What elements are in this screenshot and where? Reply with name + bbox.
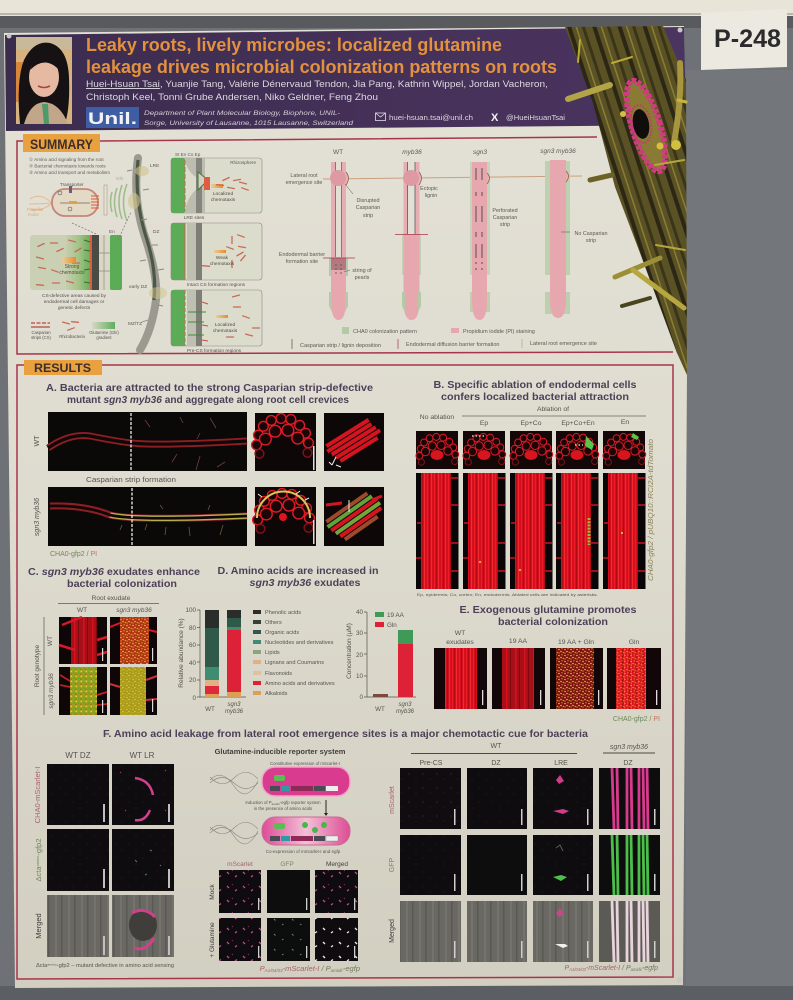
panel B column labels: En [621, 419, 629, 426]
root schematic: myb36: myb36 [402, 149, 422, 156]
panel F left row labels: CHA0-mScarlet-I [33, 767, 42, 823]
root schematic: sgn3 myb36: sgn3 myb36 [540, 148, 576, 155]
panel C heading: C. sgn3 myb36 exudates enhance [28, 567, 200, 578]
long root illustration: early DZ [129, 284, 147, 290]
summary legend: strips (CS) [31, 335, 51, 340]
bar chart: concentration: 0 [359, 694, 363, 701]
authors: Christoph Keel, Tonni Grube Andersen, Niko Geldner, Feng Zhou [86, 92, 378, 103]
panel E heading: E. Exogenous glutamine promotes [460, 605, 637, 616]
stacked bar chart: relative abundance [178, 607, 246, 715]
summary key list: ① Amino acid signaling from the root [29, 157, 104, 162]
zoom panel: LRE sites: Localized [213, 191, 233, 197]
panel C images [59, 617, 157, 715]
panel A heading [46, 382, 373, 406]
panel B cross-sections [416, 431, 646, 469]
summary caption: CS-defective areas: genetic defects [58, 305, 91, 311]
root schematic legend: Casparian strip / lignin deposition [300, 343, 381, 349]
reporter micrographs: mScarlet [227, 861, 253, 868]
summary legend [31, 322, 119, 340]
P-248 label card: P-248 [714, 25, 781, 53]
chemotaxis panel: strong [30, 229, 122, 290]
zoom panel: pre-CS regions: Localized [215, 322, 235, 328]
panel B column labels: Ep [480, 420, 488, 427]
panel E column labels: Gln [629, 639, 640, 646]
stacked bar chart: relative abundance: myb36 [225, 709, 244, 715]
root schematic: WT [323, 149, 355, 320]
bar chart: concentration: 30 [356, 630, 363, 637]
panel D heading: sgn3 myb36 exudates [250, 578, 361, 589]
contact: X handle [491, 112, 565, 124]
root schematic labels: WT: formation site [286, 259, 318, 265]
stacked bar chart: relative abundance: 20 [189, 677, 196, 684]
panel B column labels: Ep+Co [521, 420, 542, 427]
root schematic: myb36: Ectopic [420, 186, 438, 192]
panel F right headers: GFP [389, 857, 396, 872]
stacked bar chart: relative abundance: 80 [189, 625, 196, 632]
bacterium schematic [27, 176, 127, 221]
panel B longitudinal images [416, 473, 646, 589]
panel A heading: A. Bacteria are attracted to the strong Casparian strip-defective [46, 382, 373, 394]
summary panel captions: LRE sites [184, 215, 205, 221]
stacked bar chart: relative abundance: 40 [189, 660, 196, 667]
panel B side label: CHA0-gfp2 / pUBQ10::RCI2A-tdTomato [648, 439, 655, 581]
panel A: strip label: Casparian strip formation [86, 477, 176, 484]
P-248 label card [701, 9, 787, 70]
root schematic: sgn3 myb36: strip [586, 238, 596, 244]
panel C axis labels [34, 595, 159, 715]
reporter strain label: amidir [331, 968, 343, 973]
stacked bar legend: Amino acids and derivatives [265, 681, 335, 687]
root schematic labels: WT: string of [352, 268, 372, 274]
root schematic labels: WT: Lateral root [290, 173, 318, 179]
bar chart: concentration: WT [375, 706, 385, 713]
reporter system schematic: Induction of P [245, 800, 272, 805]
authors [86, 79, 548, 103]
chemotaxis panel: strong: En [109, 229, 115, 234]
chemotaxis panel: strong: chemotaxis [59, 270, 85, 276]
panel B column labels [420, 406, 646, 427]
stacked bar legend: Lignans and Coumarins [265, 660, 324, 666]
bar chart: concentration [346, 609, 416, 715]
zoom panel: pre-CS regions: chemotaxis [213, 328, 238, 334]
panel C axis labels: sgn3 myb36 [48, 673, 55, 709]
reporter system schematic: Glutamine-inducible reporter system [215, 747, 346, 756]
stacked bar legend: Flavonoids [265, 671, 292, 677]
root schematic: WT: WT [333, 149, 343, 156]
panel F right headers: Merged [389, 919, 396, 943]
root schematic: myb36 [395, 149, 438, 320]
reporter strain label, right: / P [620, 965, 658, 972]
bacterium schematic: motor [28, 212, 40, 217]
root schematic legend [292, 327, 597, 349]
root schematic: myb36: lignin [425, 193, 437, 199]
root schematic: sgn3: sgn3 [473, 149, 487, 156]
stacked bar chart: relative abundance: Relative abundance (%) [178, 618, 185, 688]
reporter system schematic [210, 747, 350, 854]
reporter micrographs: Merged [326, 861, 348, 868]
panel F right headers: mScarlet [389, 786, 396, 814]
root schematic labels: WT: Casparian [356, 205, 380, 211]
bacterium schematic: Transporter [60, 182, 84, 187]
panel A: sgn3 myb36 row [34, 487, 387, 546]
panel F footnote: amino [47, 962, 57, 966]
reporter strain label, right: -mScarlet-I [586, 965, 620, 972]
long root illustration: LRE [150, 163, 159, 169]
stacked bar chart: relative abundance: WT [205, 706, 215, 713]
title: Leaky roots, lively microbes: localized glutamine [86, 35, 502, 55]
bar chart: concentration: 20 [356, 652, 363, 659]
authors: Huei-Hsuan Tsai , Yuanjie Tang, Valérie Dénervaud Tendon, Jia Pang, Kathrin Wippel, Jordan Vacheron, [86, 79, 548, 90]
root schematic: sgn3 [470, 149, 518, 320]
panel E images [434, 648, 661, 709]
reporter strain label: P [260, 964, 265, 973]
bacterium schematic: Flagellar [27, 207, 44, 212]
root schematic: sgn3: Perforated [492, 208, 518, 214]
bar chart: concentration: 40 [356, 609, 363, 616]
root schematic: sgn3: strip [500, 222, 510, 228]
root schematic legend: Lateral root emergence site [530, 341, 597, 347]
summary key list [29, 157, 110, 175]
panel C axis labels: Root exudate [92, 595, 131, 602]
root schematic: sgn3 myb36: No Casparian [575, 231, 607, 237]
reporter system schematic: in the presence of amino acids [254, 806, 312, 811]
stacked bar chart: relative abundance: sgn3 [227, 702, 241, 708]
reporter strain label, right: A1/04/03 [568, 967, 587, 972]
reporter strain label: -egfp [343, 964, 360, 973]
root schematic labels: WT: Endodermal barrier [279, 252, 325, 258]
long root illustration: MZ/TZ [128, 321, 142, 327]
panel C axis labels: WT [47, 636, 54, 646]
stacked bar legend: Nucleotides and derivatives [265, 640, 334, 646]
panel F right headers: DZ [491, 760, 501, 767]
reporter strain label: A1/04/03 [264, 968, 283, 973]
panel C axis labels: sgn3 myb36 [116, 607, 152, 614]
panel A: sgn3 myb36 row: sgn3 myb36 [34, 498, 41, 536]
panel A: channel key: CHA0-gfp2 / PI [50, 551, 97, 558]
stacked bar legend: Phenolic acids [265, 610, 301, 616]
zoom panel: LRE sites: Rhizosphere [230, 160, 256, 165]
summary caption: CS-defective areas: endodermal cell damages or [44, 299, 105, 305]
panel C axis labels: WT [77, 607, 87, 614]
panel F right headers [389, 743, 655, 943]
panel F right headers: LRE [554, 760, 568, 767]
panel E heading: bacterial colonization [498, 617, 608, 628]
portrait photo [16, 37, 72, 124]
panel B column labels: No ablation [420, 414, 454, 421]
bacterium schematic: Gln [116, 176, 124, 181]
panel E channel key: CHA0-gfp2 / PI [613, 716, 660, 723]
bar chart: concentration: 10 [356, 673, 363, 680]
bar chart: concentration: 19 AA [387, 612, 405, 619]
affiliation: Sorge, University of Lausanne, 1015 Lausanne, Switzerland [144, 120, 353, 127]
summary legend: gradient [96, 335, 112, 340]
panel E column labels: 19 AA + Gln [558, 639, 594, 646]
long root illustration: DZ [153, 229, 159, 235]
panel C heading: bacterial colonization [67, 579, 177, 590]
root schematic labels: WT [279, 173, 380, 281]
reporter micrographs [209, 861, 358, 961]
stacked bar legend: Lipids [265, 650, 280, 656]
affiliation: Department of Plant Molecular Biology, Biophore, UNIL- [144, 110, 341, 117]
reporter strain label: -mScarlet-I [283, 964, 319, 973]
chemotaxis panel: strong: Strong [65, 264, 80, 270]
bar chart: concentration: sgn3 [398, 702, 412, 708]
root schematic legend: Propidium iodide (PI) staining [463, 329, 535, 335]
title: leakage drives microbial colonization patterns on roots [86, 57, 557, 77]
stacked bar legend: Others [265, 620, 282, 626]
panel A: WT row [34, 412, 384, 471]
panel D heading: D. Amino acids are increased in [218, 566, 378, 577]
zoom panel: intact CS regions [171, 223, 262, 280]
reporter strain label, right: -egfp [642, 965, 658, 972]
panel E column labels: WT [455, 630, 465, 637]
zoom panel: intact CS regions: chemotaxis [210, 261, 235, 267]
summary key list: ② Bacterial chemotaxis towards roots [29, 164, 106, 168]
reporter system schematic: amidir [272, 802, 280, 806]
panel E column labels [446, 630, 640, 646]
summary heading tab: SUMMARY [30, 137, 93, 152]
panel A heading: mutant sgn3 myb36 and aggregate along root cell crevices [67, 394, 349, 406]
root schematic labels: WT: Disrupted [356, 198, 380, 204]
summary legend: Rhizobacteria [59, 334, 85, 339]
stacked bar chart: relative abundance: 100 [185, 607, 196, 614]
panel A: WT row: WT [34, 435, 41, 446]
reporter micrographs: Mock [209, 883, 216, 900]
header banner [5, 27, 686, 131]
summary legend: Glutamine (Gln) [89, 330, 119, 335]
stacked bar chart: relative abundance: 60 [189, 642, 196, 649]
results frame [17, 365, 673, 979]
root schematic: lateral root line [323, 176, 582, 179]
panel B heading: confers localized bacterial attraction [441, 391, 629, 403]
contact: email: huei-hsuan.tsai@unil.ch [389, 113, 473, 122]
panel F footnote: -gfp2 – mutant defective in amino acid sensing [57, 963, 174, 969]
panel F left image grid [47, 751, 174, 957]
reporter system schematic: Co-expression of mScarlet-I and egfp [266, 849, 341, 854]
root schematic: sgn3 myb36 [540, 148, 607, 318]
panel F right headers: sgn3 myb36 [610, 744, 648, 751]
panel F left row labels: Merged [34, 913, 43, 939]
Unil logo: Unil. [88, 109, 137, 128]
contact: X handle: @HueiHsuanTsai [506, 113, 565, 122]
bar chart: concentration: Concentration (µM) [346, 623, 353, 679]
zoom panel: LRE sites: chemotaxis [211, 197, 236, 203]
summary panel captions [184, 215, 246, 354]
results heading tab [24, 360, 102, 375]
summary frame [17, 137, 673, 354]
panel F right headers: DZ [623, 760, 633, 767]
stacked bar chart: relative abundance: 0 [192, 695, 196, 702]
zoom panel: intact CS regions: Weak [216, 255, 229, 261]
panel B footnote: Ep, epidermis; Co, cortex; En, endodermis. Ablated cells are indicated by asterisks. [417, 592, 598, 597]
panel F heading: F. Amino acid leakage from lateral root emergence sites is a major chemotactic cue for bacteria [103, 729, 588, 740]
reporter system schematic: Constitutive expression of mScarlet-I [270, 761, 340, 766]
summary panel captions: Intact CS formation regions [187, 282, 246, 288]
panel F right image grid [400, 768, 660, 962]
panel B column labels: Ep+Co+En [561, 420, 595, 427]
title [86, 35, 557, 77]
long root illustration [72, 158, 167, 350]
panel B heading [434, 379, 637, 403]
zoom panel: LRE sites [171, 152, 262, 213]
panel F left image grid: WT DZ [65, 751, 91, 760]
zoom panel: LRE sites: St En Co Ep [175, 152, 201, 157]
panel F right headers: Pre-CS [420, 760, 443, 767]
panel B column labels: Ablation of [537, 406, 569, 413]
panel B heading: B. Specific ablation of endodermal cells [434, 379, 637, 391]
stacked bar legend [253, 610, 335, 697]
reporter strain label, right: P [564, 965, 569, 972]
stacked bar legend: Organic acids [265, 630, 299, 636]
root schematic: sgn3: Casparian [493, 215, 517, 221]
summary caption: CS-defective areas: CS-defective areas caused by [42, 293, 107, 299]
stacked bar legend: Alkaloids [265, 691, 288, 697]
summary panel captions: Pre-CS formation regions [187, 348, 242, 354]
panel D heading [218, 566, 378, 589]
panel C axis labels: Root genotype [34, 644, 41, 687]
panel F left row labels: amino [35, 855, 40, 866]
summary legend: Casparian [31, 330, 51, 335]
affiliation [144, 110, 353, 127]
results heading tab: RESULTS [34, 361, 91, 375]
reporter system schematic: -egfp reporter system [280, 800, 321, 805]
panel F left row labels: Δcta [34, 866, 43, 882]
panel F footnote: Δcta [36, 963, 46, 969]
summary caption: CS-defective areas [42, 293, 107, 311]
root schematic legend: CHA0 colonization pattern [353, 329, 417, 335]
decorative root micrograph [565, 26, 687, 375]
panel E column labels: 19 AA [509, 638, 528, 645]
bar chart: concentration: Gln [387, 622, 397, 629]
Unil logo [86, 107, 139, 128]
zoom panel: pre-CS regions [171, 290, 262, 346]
reporter strain label, right: amidir [631, 967, 643, 972]
reporter micrographs: GFP [280, 861, 294, 868]
panel E heading [460, 605, 637, 628]
summary key list: ③ Amino acid transport and metabolism [29, 170, 110, 175]
panel F left row labels [33, 767, 43, 939]
root schematic labels: WT: strip [363, 213, 373, 219]
root schematic labels: WT: pearls [355, 275, 370, 281]
root schematic labels: WT: emergence site [286, 180, 322, 186]
root schematic legend: Endodermal diffusion barrier formation [406, 342, 499, 348]
panel F left image grid: WT LR [130, 751, 155, 760]
panel E column labels: exudates [446, 639, 474, 646]
reporter micrographs: + Glutamine [209, 922, 216, 958]
panel F right headers: WT [491, 743, 502, 750]
panel C heading [28, 567, 200, 590]
panel F left row labels: -gfp2 [34, 838, 43, 856]
bar chart: concentration: myb36 [396, 709, 415, 715]
contact: X handle: X [491, 112, 499, 124]
reporter strain label: / P [319, 964, 360, 973]
